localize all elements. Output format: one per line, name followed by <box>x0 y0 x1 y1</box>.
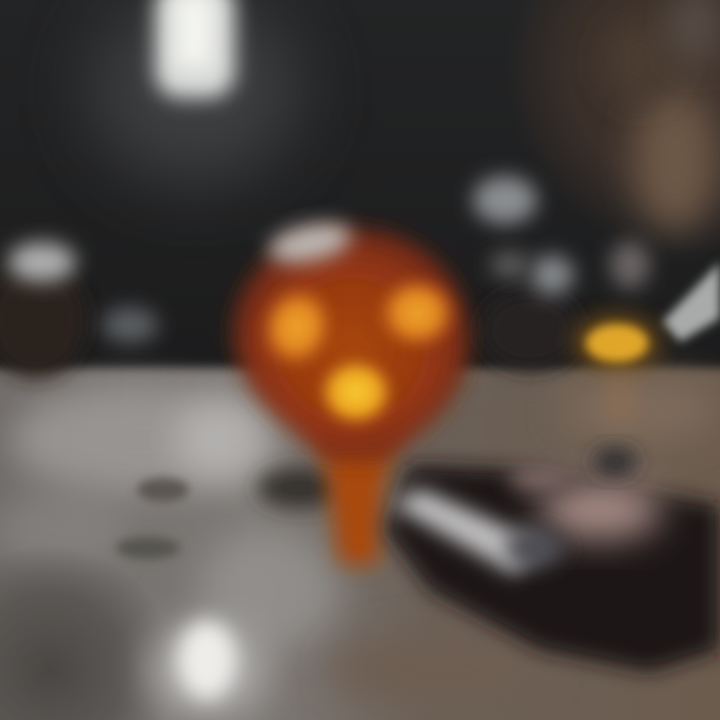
mouth <box>314 354 398 430</box>
white top surface of box <box>392 488 545 575</box>
balloon stem <box>318 410 398 565</box>
glowing orange light on right <box>573 313 661 424</box>
left eye <box>246 272 348 382</box>
right eye <box>373 273 461 353</box>
floor <box>0 368 720 720</box>
ceiling light glow <box>90 0 300 185</box>
pink contents <box>538 480 662 540</box>
black box lower right <box>385 448 720 672</box>
left dark object with white top <box>0 242 158 378</box>
orange skull balloon <box>233 217 470 460</box>
balloon top highlight <box>265 217 355 269</box>
floor reflection light <box>145 620 269 720</box>
floor dark spots <box>116 468 342 559</box>
brown shelves upper right <box>500 0 720 255</box>
background objects right of centre <box>473 176 720 370</box>
